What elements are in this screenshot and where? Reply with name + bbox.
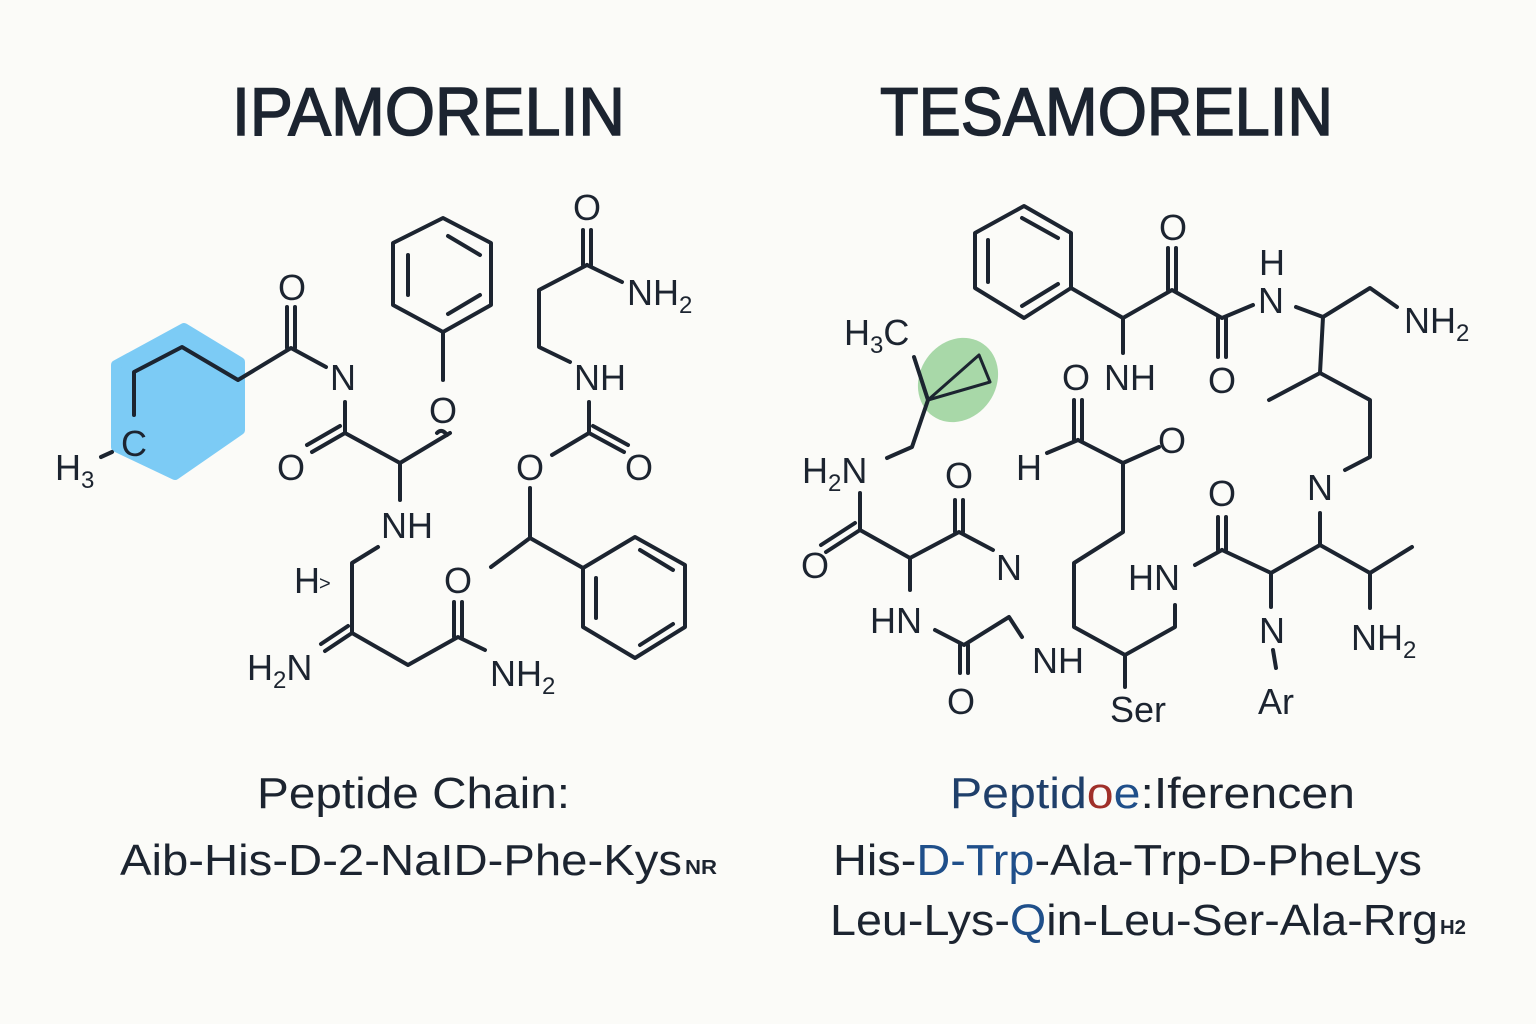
caption: tesamorelin peptide chain: Peptid oe:Iferencen: [950, 769, 1355, 818]
atom labels: ipamorelin: [55, 187, 692, 700]
caption: tesamorelin peptide chain: H2: [1440, 917, 1466, 939]
atom labels: ipamorelin: NH: [627, 272, 679, 313]
atom labels: tesamorelin: 3: [870, 332, 883, 359]
atom labels: tesamorelin: N: [1258, 280, 1284, 321]
caption: ipamorelin peptide chain: Aib-His-D-2-NaID-Phe-Kys: [120, 836, 682, 885]
atom labels: ipamorelin: O: [429, 390, 457, 431]
atom labels: ipamorelin: N: [330, 357, 356, 398]
atom labels: ipamorelin: O: [625, 447, 653, 488]
atom labels: tesamorelin: O: [1208, 360, 1236, 401]
atom labels: ipamorelin: NH: [574, 357, 626, 398]
atom labels: ipamorelin: O: [277, 447, 305, 488]
atom labels: tesamorelin: H: [1259, 242, 1285, 283]
atom labels: ipamorelin: 2: [542, 673, 555, 700]
highlight: blue hexagon: [116, 328, 240, 475]
atom labels: ipamorelin: O: [573, 187, 601, 228]
atom labels: tesamorelin: O: [801, 545, 829, 586]
atom labels: tesamorelin: N: [841, 450, 867, 491]
atom labels: tesamorelin: HN: [1128, 557, 1180, 598]
caption: ipamorelin peptide chain: [120, 769, 718, 885]
atom labels: tesamorelin: O: [947, 681, 975, 722]
atom labels: tesamorelin: [801, 207, 1469, 730]
atom labels: ipamorelin: 3: [81, 467, 94, 494]
atom labels: tesamorelin: O: [1158, 420, 1186, 461]
atom labels: tesamorelin: N: [1259, 610, 1285, 651]
atom labels: tesamorelin: Ser: [1110, 689, 1166, 730]
title: tesamorelin: TESAMORELIN: [880, 74, 1333, 150]
atom labels: tesamorelin: NH: [1404, 300, 1456, 341]
atom labels: ipamorelin: NH: [490, 653, 542, 694]
atom labels: tesamorelin: O: [1159, 207, 1187, 248]
atom labels: tesamorelin: N: [996, 547, 1022, 588]
atom labels: tesamorelin: O: [1062, 357, 1090, 398]
atom labels: tesamorelin: C: [883, 312, 909, 353]
atom labels: ipamorelin: C: [121, 423, 147, 464]
atom labels: tesamorelin: Ar: [1258, 681, 1294, 722]
atom labels: tesamorelin: NH: [1351, 617, 1403, 658]
atom labels: ipamorelin: O: [278, 267, 306, 308]
atom labels: tesamorelin: NH: [1032, 640, 1084, 681]
atom labels: ipamorelin: 2: [679, 292, 692, 319]
atom labels: tesamorelin: 2: [1456, 320, 1469, 347]
atom labels: tesamorelin: NH: [1104, 357, 1156, 398]
atom labels: ipamorelin: >: [319, 573, 331, 595]
caption: tesamorelin peptide chain: Leu-Lys-Qin-Leu-Ser-Ala-Rrg: [830, 896, 1438, 945]
atom labels: ipamorelin: H: [294, 560, 320, 601]
atom labels: tesamorelin: O: [1208, 473, 1236, 514]
structure: tesamorelin: [821, 206, 1412, 687]
title: ipamorelin: IPAMORELIN: [232, 74, 625, 150]
atom labels: tesamorelin: H: [802, 450, 828, 491]
caption: ipamorelin peptide chain: NR: [685, 857, 718, 879]
atom labels: ipamorelin: O: [516, 447, 544, 488]
atom labels: ipamorelin: H: [55, 447, 81, 488]
atom labels: tesamorelin: H: [844, 312, 870, 353]
atom labels: tesamorelin: H: [1016, 447, 1042, 488]
atom labels: ipamorelin: 2: [273, 667, 286, 694]
atom labels: ipamorelin: H: [247, 647, 273, 688]
atom labels: tesamorelin: 2: [828, 470, 841, 497]
structure: ipamorelin: [101, 218, 685, 665]
caption: ipamorelin peptide chain: Peptide Chain:: [257, 769, 570, 818]
atom labels: ipamorelin: O: [444, 560, 472, 601]
atom labels: tesamorelin: N: [1307, 467, 1333, 508]
caption: tesamorelin peptide chain: [830, 769, 1466, 945]
highlight: green blob: [902, 322, 1014, 438]
atom labels: tesamorelin: O: [945, 455, 973, 496]
atom labels: tesamorelin: 2: [1403, 637, 1416, 664]
caption: tesamorelin peptide chain: His-D-Trp-Ala-Trp-D-PheLys: [833, 836, 1422, 885]
atom labels: tesamorelin: HN: [870, 600, 922, 641]
atom labels: ipamorelin: NH: [381, 505, 433, 546]
atom labels: ipamorelin: N: [286, 647, 312, 688]
